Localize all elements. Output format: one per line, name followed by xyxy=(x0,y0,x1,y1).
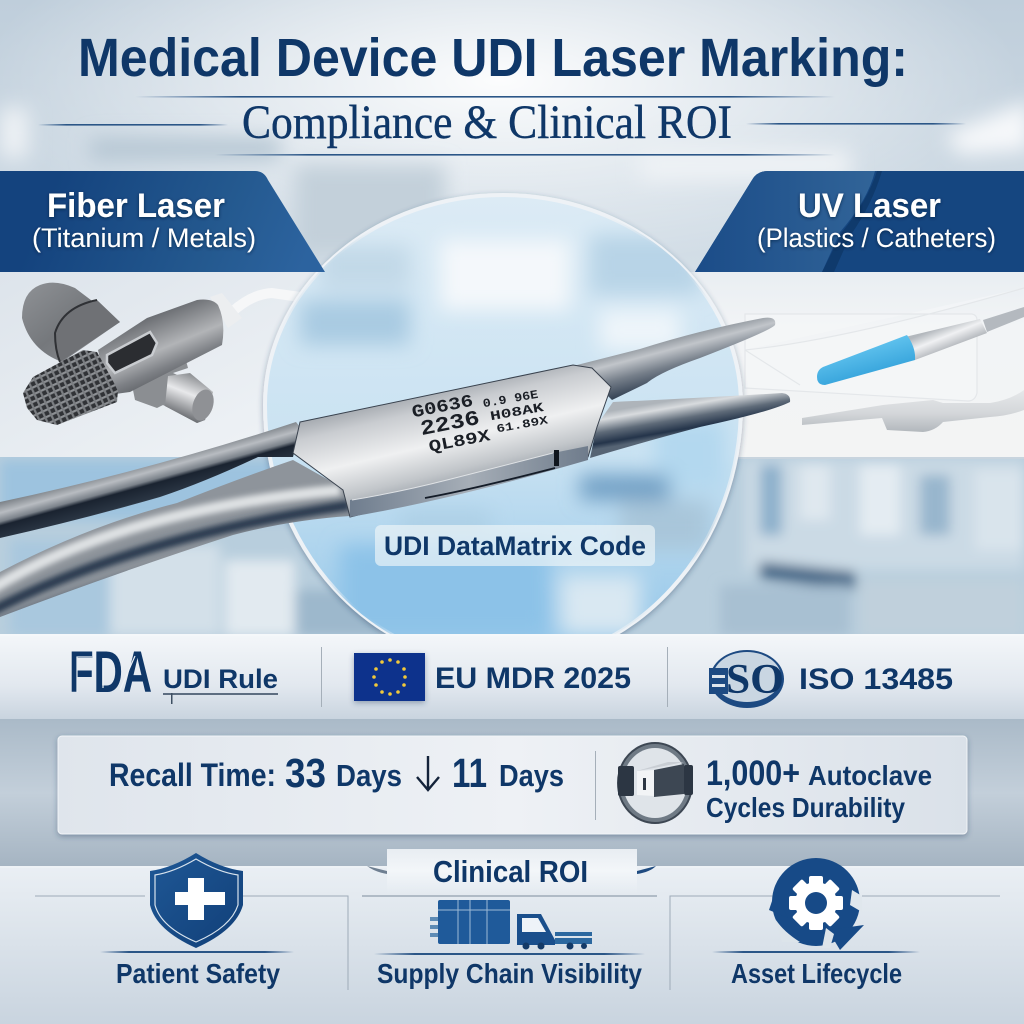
magnifier lens circle xyxy=(265,195,741,665)
laser marked code: QL89X xyxy=(427,426,492,457)
laser marked code: 2236 xyxy=(419,408,482,442)
banner: fiber laser: Fiber Laser xyxy=(47,187,225,225)
laser marked code: 0.9 96E xyxy=(482,388,539,411)
banner: UV laser: (Plastics / Catheters) xyxy=(757,223,996,253)
implant: porous mesh tip xyxy=(23,350,118,425)
EU MDR label: EU MDR 2025 xyxy=(435,662,631,695)
recall time metric: 11 xyxy=(452,750,487,796)
autoclave durability text: Cycles Durability xyxy=(706,792,905,823)
mid band background xyxy=(0,719,1024,867)
forceps central plate xyxy=(293,365,611,517)
recall time metric: Days xyxy=(336,758,402,793)
catheter: blue tip xyxy=(817,307,1024,385)
background: blurred hospital room xyxy=(0,0,1024,636)
laser marked code xyxy=(410,387,549,459)
forceps upper jaw xyxy=(577,318,775,400)
label: patient safety: Patient Safety xyxy=(116,958,280,989)
clinical ROI tab xyxy=(367,849,656,893)
label: asset lifecycle: Asset Lifecycle xyxy=(731,958,902,989)
banner: UV laser: UV Laser xyxy=(798,187,941,225)
label: UDI DataMatrix Code xyxy=(375,525,655,566)
recall time metric: 33 xyxy=(285,750,326,796)
icon: delivery truck xyxy=(430,900,592,950)
ISO logo xyxy=(709,650,784,708)
forceps lower jaw xyxy=(590,393,790,458)
ISO 13485 label: ISO 13485 xyxy=(799,663,953,696)
forceps upper handle xyxy=(0,422,300,538)
subtitle with rules: Compliance & Clinical ROI xyxy=(242,96,732,149)
autoclave durability text: 1,000+ xyxy=(706,754,800,793)
banner: UV laser xyxy=(695,171,1024,272)
implant: metal pin xyxy=(133,357,217,423)
banner: fiber laser xyxy=(0,171,325,272)
recall time metric xyxy=(109,750,564,796)
forceps box lock slot xyxy=(350,446,588,517)
ISO logo: SO xyxy=(726,657,784,703)
label: UDI DataMatrix Code: UDI DataMatrix Code xyxy=(384,531,646,561)
implant: angled body with slot xyxy=(98,300,223,395)
EU flag xyxy=(354,653,425,701)
catheter: silver tip xyxy=(802,390,1024,432)
title: Medical Device UDI Laser Marking: xyxy=(78,28,908,88)
FDA UDI Rule label: UDI Rule xyxy=(163,664,278,694)
autoclave durability text xyxy=(706,754,932,823)
panel: UV laser product photo xyxy=(675,272,1024,459)
icon: gear with cycle arrows xyxy=(769,858,864,950)
laser marked code: G0636 xyxy=(410,392,475,423)
FDA logo: FDA xyxy=(69,640,152,705)
panel: key metrics card xyxy=(58,736,967,834)
panel: fiber laser product photo xyxy=(0,272,345,457)
banner: fiber laser: (Titanium / Metals) xyxy=(32,223,256,253)
clinical ROI tab: Clinical ROI xyxy=(433,854,588,889)
recall time metric: Days xyxy=(499,758,564,793)
recall time metric: Recall Time: xyxy=(109,757,276,793)
panel: clinical ROI section xyxy=(0,849,1024,1024)
autoclave durability text: Autoclave xyxy=(808,760,932,791)
cable xyxy=(210,293,300,328)
clear pouch xyxy=(745,288,1024,401)
panel: regulatory standards band xyxy=(0,634,1024,719)
forceps lower handle xyxy=(0,455,352,626)
icon: autoclave drum xyxy=(618,743,693,823)
forceps instrument xyxy=(0,318,790,626)
label: supply chain visibility: Supply Chain Visibility xyxy=(377,958,642,989)
laser marked code: H08AK xyxy=(489,400,545,424)
implant: threaded cylinder xyxy=(22,283,120,362)
icon: shield with cross xyxy=(150,853,243,948)
FDA logo xyxy=(69,640,152,705)
laser marked code: 61.89X xyxy=(496,414,549,436)
